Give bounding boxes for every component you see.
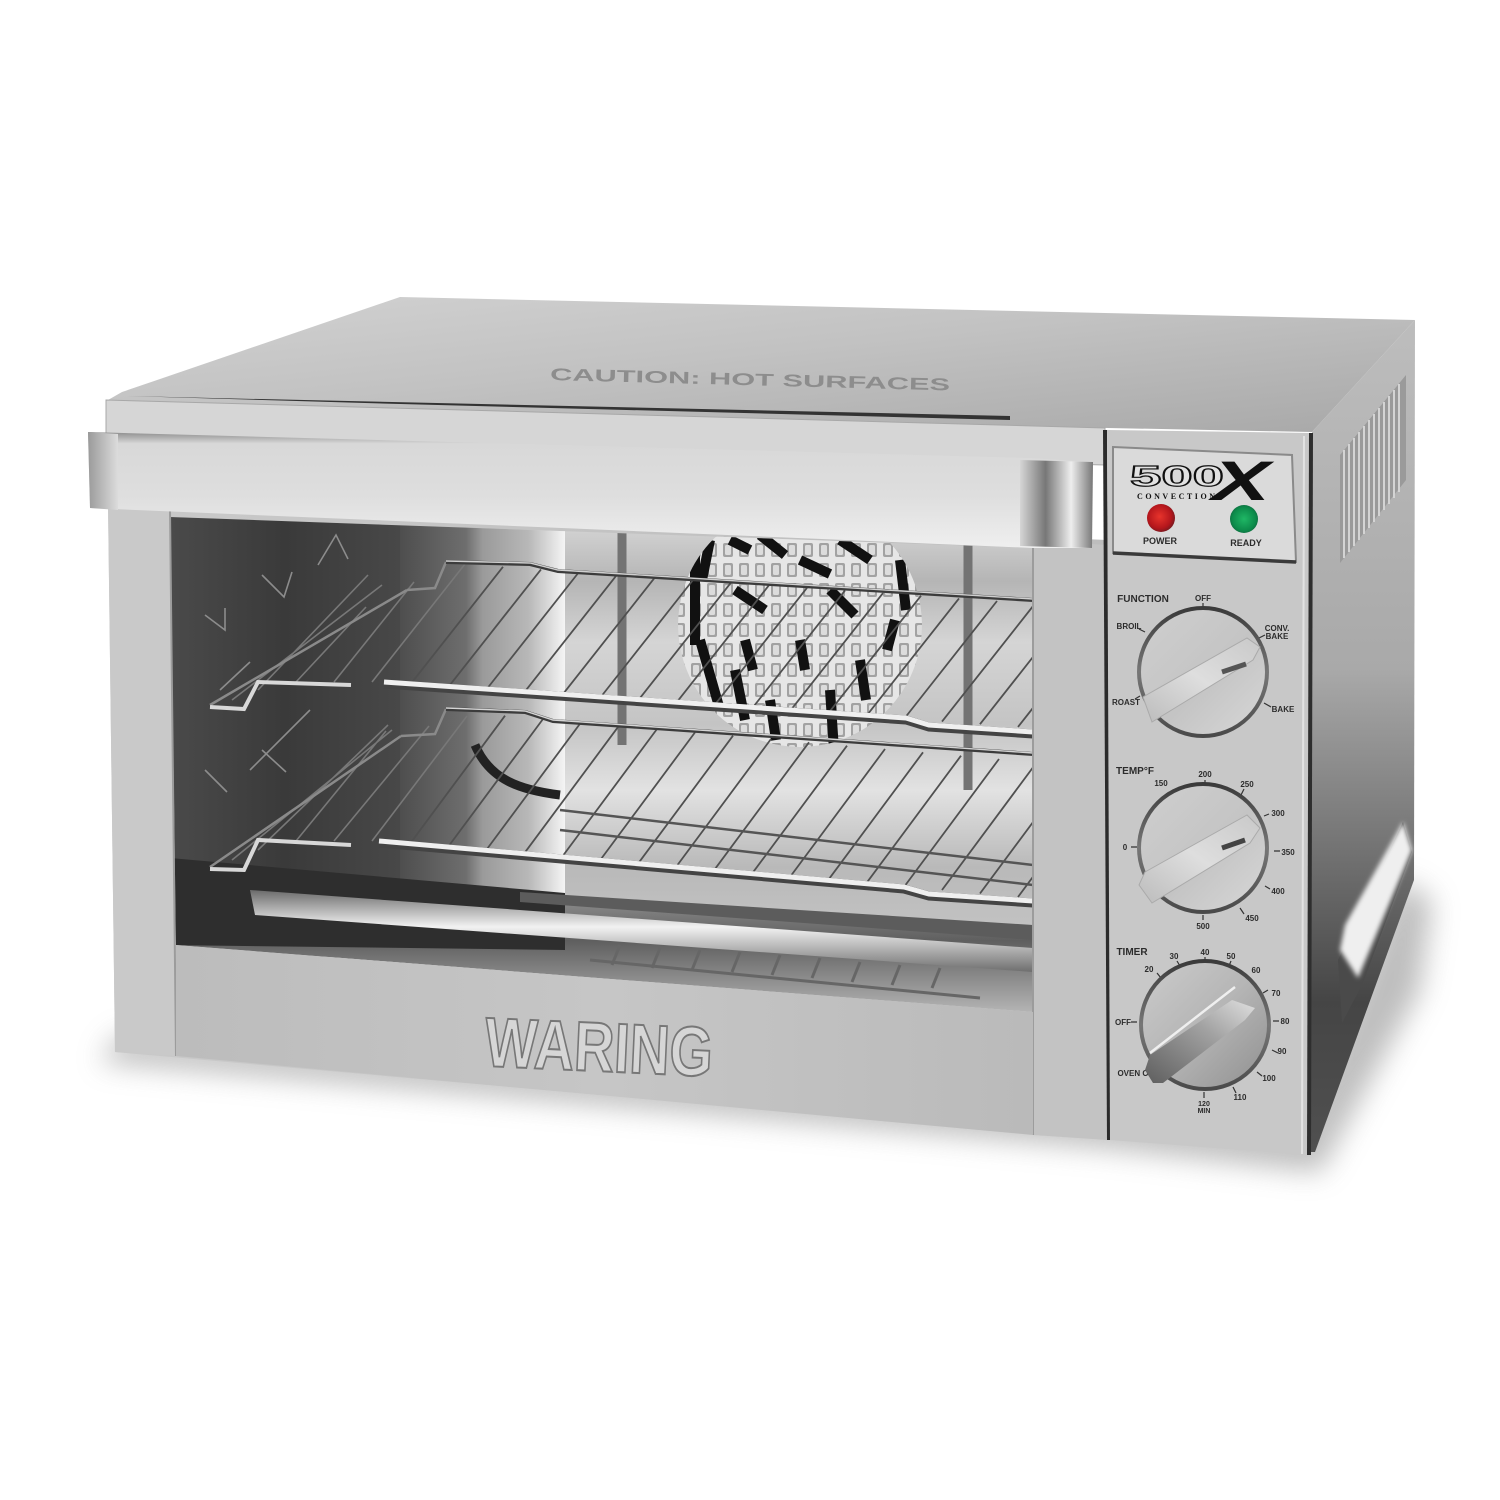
lower rack <box>210 708 1113 903</box>
timer dial: 100 <box>1262 1074 1276 1083</box>
left wall rack guides <box>205 535 348 792</box>
temperature dial <box>1116 766 1295 931</box>
function dial: BAKE <box>1272 705 1295 714</box>
side carry handle <box>1338 822 1412 1023</box>
timer dial: MIN <box>1198 1108 1210 1115</box>
control panel <box>1107 430 1311 1155</box>
function dial: BROIL <box>1117 622 1142 631</box>
ready label: READY <box>1230 538 1262 548</box>
temperature dial: 500 <box>1196 922 1210 931</box>
timer dial: OFF <box>1115 1018 1131 1027</box>
timer dial: TIMER <box>1116 947 1148 958</box>
caution embossed text: CAUTION: HOT SURFACES <box>550 365 950 394</box>
500X convection logo: 500 <box>1130 461 1224 493</box>
timer dial: 70 <box>1272 989 1281 998</box>
timer dial: 90 <box>1278 1047 1287 1056</box>
ground shadow <box>100 880 1432 1172</box>
500X convection logo: CONVECTION <box>1137 492 1215 501</box>
door handle bar <box>88 432 1093 548</box>
timer dial: 20 <box>1145 965 1154 974</box>
timer dial: 50 <box>1227 952 1236 961</box>
timer dial: OVEN O <box>1117 1069 1149 1078</box>
function dial <box>1112 594 1295 736</box>
bright side column <box>400 515 565 895</box>
timer dial: 110 <box>1234 1093 1247 1102</box>
function dial: BAKE <box>1266 632 1289 641</box>
timer dial: 30 <box>1170 952 1179 961</box>
500X convection logo <box>1130 449 1276 512</box>
door panel divider <box>1105 430 1109 1140</box>
door lower panel <box>176 945 1033 1135</box>
right side of oven <box>1308 320 1415 1152</box>
temperature dial: TEMP°F <box>1116 766 1154 777</box>
heating element bar <box>250 890 1033 972</box>
timer dial: 40 <box>1201 948 1210 957</box>
side vent fins <box>1340 375 1406 563</box>
temperature dial: 0 <box>1123 843 1128 852</box>
500X convection logo: X <box>1207 449 1276 512</box>
temperature dial: 200 <box>1198 770 1212 779</box>
function dial: CONV. <box>1265 624 1289 633</box>
function dial: OFF <box>1195 594 1211 603</box>
power label: POWER <box>1143 536 1177 546</box>
temperature dial: 250 <box>1240 780 1254 789</box>
door frame <box>108 500 1108 1140</box>
door upper trim <box>106 400 1105 465</box>
top face of oven <box>108 297 1415 432</box>
bottom rack reflection <box>590 954 980 1000</box>
timer dial: 60 <box>1252 966 1261 975</box>
oven window cavity <box>171 517 1032 1012</box>
power light <box>1147 504 1175 532</box>
temperature dial: 350 <box>1281 848 1295 857</box>
oven floor reflection <box>170 870 1033 1012</box>
left cavity wall <box>170 510 400 960</box>
timer dial: 120 <box>1198 1101 1210 1108</box>
function dial: ROAST <box>1112 698 1140 707</box>
timer dial: 80 <box>1281 1017 1290 1026</box>
temperature dial: 450 <box>1245 914 1259 923</box>
temperature dial: 400 <box>1271 887 1285 896</box>
door left and right strips <box>108 505 1108 1140</box>
function dial: FUNCTION <box>1117 594 1169 605</box>
convection fan grille <box>678 536 922 747</box>
timer dial <box>1115 947 1290 1115</box>
oven product illustration <box>88 297 1444 1185</box>
rear vertical rods <box>622 530 968 790</box>
temperature dial: 300 <box>1271 809 1285 818</box>
indicator badge <box>1113 447 1296 562</box>
WARING logo: WARING <box>483 1003 715 1091</box>
curved lower cavity corner <box>475 745 560 795</box>
ready light <box>1230 505 1258 533</box>
temperature dial: 150 <box>1154 779 1168 788</box>
upper rack <box>210 561 1111 734</box>
